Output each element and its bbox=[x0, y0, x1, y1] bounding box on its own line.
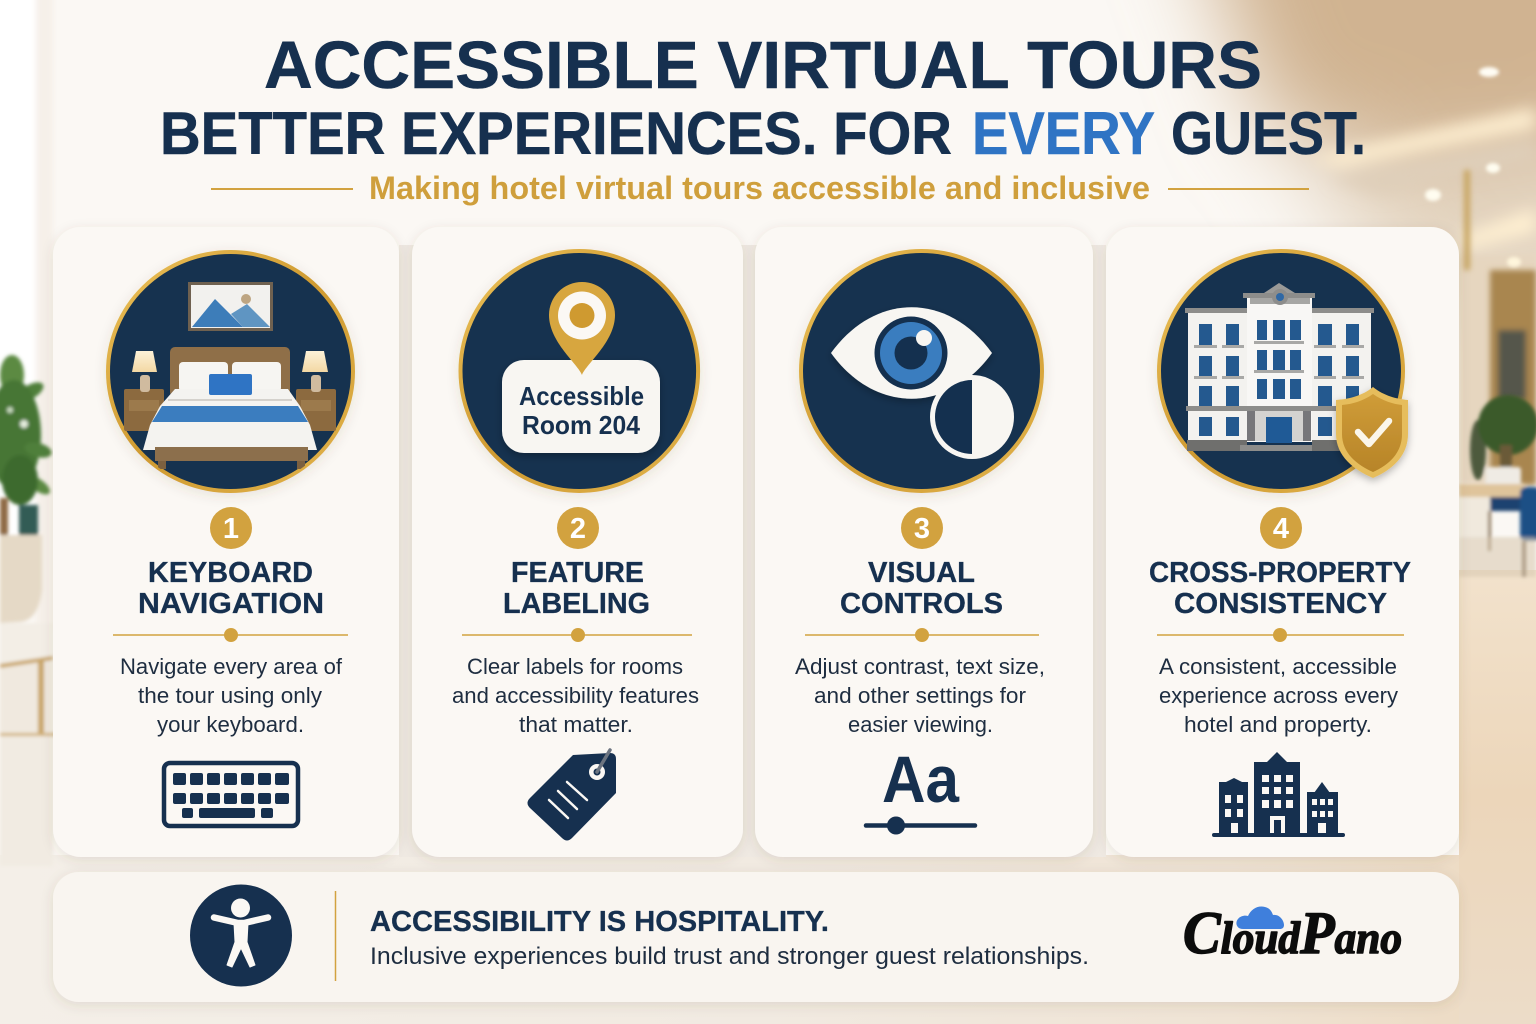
heading: visual controls: CONTROLS bbox=[840, 588, 1003, 620]
text: visual description: Adjust contrast, text size, bbox=[795, 654, 1045, 679]
heading: feature labeling: FEATURE bbox=[511, 557, 644, 589]
number badge 2 bbox=[557, 507, 599, 549]
panel: bottom banner bbox=[53, 872, 1459, 1002]
title line 2 bbox=[160, 100, 1366, 167]
icon: hotel bedroom bbox=[108, 252, 353, 491]
text: labeling description: that matter. bbox=[519, 712, 633, 737]
label: accessible room 204: Accessible bbox=[519, 381, 644, 411]
icon: text size slider: Aa bbox=[882, 742, 960, 816]
number badge 4: 4 bbox=[1273, 513, 1289, 545]
text: keyboard description: Navigate every area of bbox=[120, 654, 343, 679]
subtitle: Making hotel virtual tours accessible and inclusive bbox=[369, 170, 1150, 206]
title line 2: EVERY bbox=[972, 100, 1155, 167]
icon: hotel building bbox=[1185, 283, 1374, 451]
label: accessible room 204 bbox=[502, 360, 660, 453]
text: banner message: Inclusive experiences build trust and stronger guest relationships. bbox=[370, 943, 1089, 970]
text: consistency description: hotel and property. bbox=[1184, 712, 1372, 737]
text: labeling description: Clear labels for rooms bbox=[467, 654, 683, 679]
icon: hotel building with shield bbox=[1159, 251, 1408, 491]
icon: city buildings bbox=[1212, 752, 1345, 837]
number badge 1: 1 bbox=[223, 513, 239, 545]
text: banner message: ACCESSIBILITY IS HOSPITALITY. bbox=[370, 906, 829, 938]
number badge 3: 3 bbox=[914, 513, 930, 545]
text: visual description bbox=[795, 654, 1045, 737]
icon: price tag bbox=[528, 750, 616, 840]
heading: cross-property consistency bbox=[1149, 557, 1411, 620]
left plant, pot and table bbox=[0, 355, 90, 866]
text: labeling description bbox=[452, 654, 699, 737]
heading: cross-property consistency: CROSS-PROPERTY bbox=[1149, 557, 1411, 589]
heading: keyboard navigation: KEYBOARD bbox=[148, 557, 313, 589]
icon: keyboard bbox=[164, 763, 298, 826]
gaps behind cards bbox=[399, 245, 1106, 857]
text: visual description: easier viewing. bbox=[848, 712, 993, 737]
number badge 4 bbox=[1260, 507, 1302, 549]
panel: cross-property consistency bbox=[1106, 227, 1459, 857]
ceiling bbox=[1180, 0, 1536, 320]
heading: feature labeling: LABELING bbox=[503, 588, 650, 620]
icon: map pin bbox=[549, 282, 615, 375]
logo: CloudPano: CloudPano bbox=[1183, 900, 1402, 966]
icon: eye with contrast bbox=[801, 251, 1042, 491]
text: consistency description: experience across every bbox=[1159, 683, 1398, 708]
text: labeling description: and accessibility features bbox=[452, 683, 699, 708]
number badge 3 bbox=[901, 507, 943, 549]
left wall bbox=[0, 0, 53, 630]
floor bbox=[0, 855, 1536, 1024]
title bbox=[160, 28, 1366, 167]
panel: keyboard navigation bbox=[53, 227, 399, 857]
number badge 1 bbox=[210, 507, 252, 549]
icon: location pin with room label bbox=[460, 251, 698, 491]
title line 1: ACCESSIBLE VIRTUAL TOURS bbox=[264, 28, 1262, 103]
panel: feature labeling bbox=[412, 227, 743, 857]
text: keyboard description bbox=[120, 654, 343, 737]
number badge 2: 2 bbox=[570, 513, 586, 545]
label: accessible room 204: Room 204 bbox=[522, 410, 641, 440]
heading: keyboard navigation bbox=[138, 557, 324, 620]
text: visual description: and other settings for bbox=[814, 683, 1026, 708]
text: banner message bbox=[370, 906, 1089, 970]
icon: text size slider bbox=[866, 742, 975, 834]
right furniture and plant bbox=[1459, 395, 1536, 577]
panel: visual controls bbox=[755, 227, 1093, 857]
icon: contrast circle bbox=[930, 375, 1014, 459]
icon: accessibility figure bbox=[190, 884, 292, 986]
heading: cross-property consistency: CONSISTENCY bbox=[1174, 588, 1387, 620]
text: consistency description: A consistent, accessible bbox=[1159, 654, 1397, 679]
title line 2: BETTER EXPERIENCES. FOR bbox=[160, 100, 952, 167]
icon: eye bbox=[831, 307, 992, 399]
heading: keyboard navigation: NAVIGATION bbox=[138, 588, 324, 620]
icon: gold shield with check bbox=[1336, 387, 1408, 478]
text: consistency description bbox=[1159, 654, 1398, 737]
text: keyboard description: your keyboard. bbox=[157, 712, 304, 737]
text: keyboard description: the tour using only bbox=[138, 683, 322, 708]
heading: feature labeling bbox=[503, 557, 650, 620]
heading: visual controls: VISUAL bbox=[868, 557, 975, 589]
title line 2: GUEST. bbox=[1171, 100, 1366, 167]
heading: visual controls bbox=[840, 557, 1003, 620]
